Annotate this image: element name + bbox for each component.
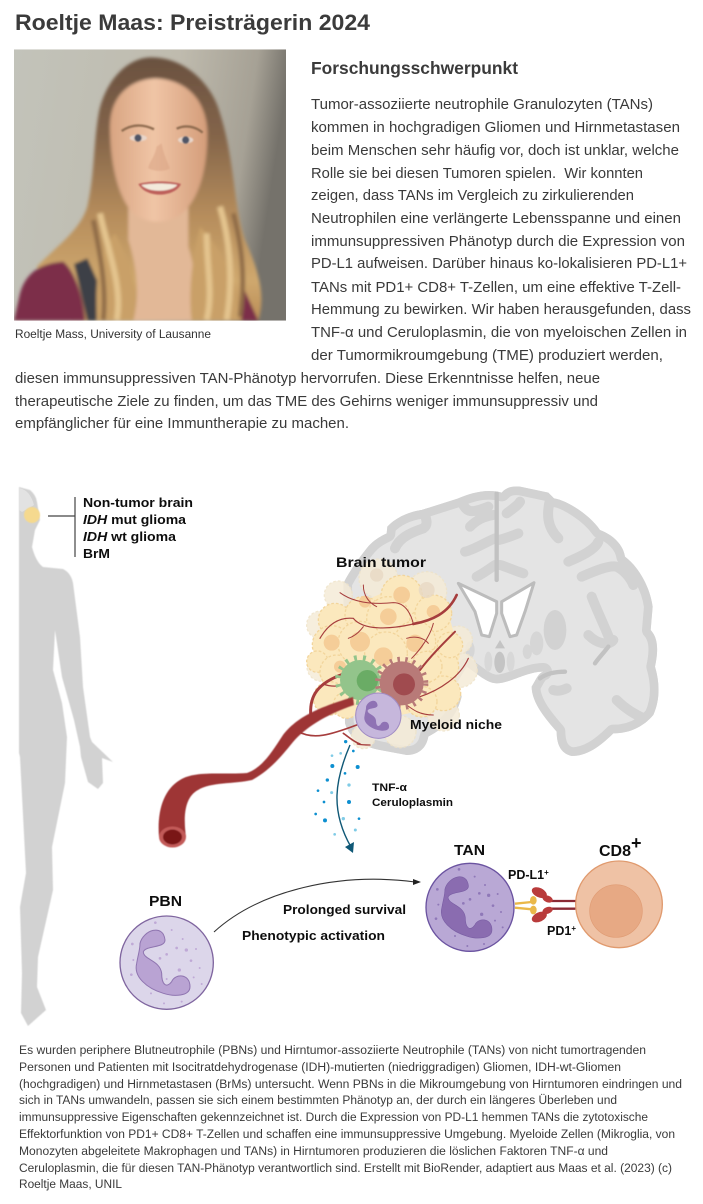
label: myeloid niche: Myeloid niche <box>410 717 502 732</box>
label: CD8+: + <box>631 833 642 853</box>
sample type list: IDH mut glioma <box>83 512 187 527</box>
icon: purple TAN in niche <box>356 693 401 738</box>
body text: Hemmung zu bewirken. Wir haben herausgefunden, dass <box>311 301 691 318</box>
brain tumor cell cluster <box>298 559 477 749</box>
PD-L1 and PD1 receptor interaction <box>515 885 575 925</box>
human silhouette <box>19 487 113 1026</box>
blood vessel tube <box>159 697 354 848</box>
body text: diesen immunsuppressiven TAN-Phänotyp hervorrufen. Diese Erkenntnisse helfen, neue <box>15 370 600 387</box>
body text: Tumor-assoziierte neutrophile Granulozyten (TANs) <box>311 96 653 113</box>
cell: CD8 T cell <box>576 861 662 948</box>
sample type list: IDH wt glioma <box>83 529 177 544</box>
figure caption: Effektorfunktion von PD1+ CD8+ T-Zellen und schaffen eine immunsuppressive Umgebung. Myeloide Zellen (Mikroglia, von <box>19 1127 675 1141</box>
figure caption: sich in TANs umwandeln, passen sie sich einem bestimmten Phänotyp an, der durch ein längeres Überleben und <box>19 1093 617 1107</box>
sample type list <box>83 495 193 561</box>
label: PD-L1+: + <box>544 868 549 877</box>
body text: TANs mit PD1+ CD8+ T-Zellen, um eine effektive T-Zell- <box>311 279 681 296</box>
label: TAN: TAN <box>454 843 485 859</box>
figure caption <box>19 1043 682 1191</box>
sample type list: Non-tumor brain <box>83 495 193 510</box>
sample type list: BrM <box>83 546 110 561</box>
label: PBN: PBN <box>149 893 182 910</box>
cell: PBN <box>120 916 213 1009</box>
label: PD1+: PD1 <box>547 924 571 938</box>
icon: red macrophage cell <box>379 661 424 706</box>
label: PD-L1+: PD-L1 <box>508 868 544 882</box>
label: arrow captions <box>242 902 406 943</box>
cytokine dots <box>314 740 360 836</box>
cell: TAN <box>426 863 514 951</box>
body text: TNF-α und Ceruloplasmin, die von myeloischen Zellen in <box>311 324 687 341</box>
figure caption: Es wurden periphere Blutneutrophile (PBNs) und Hirntumor-assoziierte Neutrophile (TANs) von nicht tumortragenden <box>19 1043 646 1057</box>
figure caption: Personen und Patienten mit Isocitratdehydrogenase (IDH)-mutierten (niedriggradigen) Gliomen, IDH-wt-Gliomen <box>19 1060 621 1074</box>
body text: therapeutische Ziele zu finden, um das TME des Gehirns weniger immunsuppressiv und <box>15 393 598 410</box>
label: arrow captions: Phenotypic activation <box>242 928 385 943</box>
label: cytokines: Ceruloplasmin <box>372 797 453 809</box>
photo caption: Roeltje Mass, University of Lausanne <box>15 327 211 341</box>
ventricles <box>458 583 534 637</box>
label: PD1+: + <box>571 924 576 933</box>
body text: Neutrophilen eine verlängerte Lebensspanne und einen <box>311 210 681 227</box>
body text: kommen in hochgradigen Gliomen und Hirnmetastasen <box>311 119 680 136</box>
brain cross-section <box>343 486 659 756</box>
figure caption: Roeltje Maas, UNIL <box>19 1177 122 1191</box>
figure caption: (hochgradigen) und Hirnmetastasen (BrMs) untersucht. Wenn PBNs in die Mikroumgebung von Hirntumoren eindringen und <box>19 1077 682 1091</box>
arrow: PBN to TAN <box>214 879 421 932</box>
label: CD8+: CD8 <box>599 843 631 860</box>
sample type bracket <box>48 497 75 557</box>
icon: tumor in head <box>24 507 40 523</box>
figure caption: Ceruloplasmin, die für diesen TAN-Phänotyp verantwortlich sind. Erstellt mit BioRender, adaptiert aus Maas et al. (2023) (c) <box>19 1161 672 1175</box>
body text: zeigen, dass TANs im Vergleich zu zirkulierenden <box>311 187 634 204</box>
portrait photo <box>14 49 286 321</box>
body text <box>15 96 691 432</box>
body text: PD-L1 aufweisen. Darüber hinaus ko-lokalisieren PD-L1+ <box>311 255 687 272</box>
figure caption: immunsuppressive Eigenschaften gekennzeichnet ist. Durch die Expression von PD-L1 hemmen TANs die zytotoxische <box>19 1110 648 1124</box>
body text: Rolle sie bei diesen Tumoren spielen. Wir konnten <box>311 165 643 182</box>
figure caption: Monozyten abgeleitete Makrophagen und TANs) in Hirntumoren produzieren die löslichen Faktoren TNF-α und <box>19 1144 608 1158</box>
title: Roeltje Maas: Preisträgerin 2024 <box>15 10 371 35</box>
body text: beim Menschen sehr häufig vor, doch ist unklar, welche <box>311 142 679 159</box>
arrow: cytokines to TAN <box>337 745 354 853</box>
section heading: Forschungsschwerpunkt <box>311 58 518 78</box>
body text: empfänglicher für eine Immuntherapie zu machen. <box>15 415 349 432</box>
body text: der Tumormikroumgebung (TME) produziert werden, <box>311 347 663 364</box>
label: arrow captions: Prolonged survival <box>283 902 406 917</box>
label: cytokines: TNF-α <box>372 782 407 794</box>
icon: green microglia cell <box>339 659 381 701</box>
label: brain tumor: Brain tumor <box>336 555 427 570</box>
body text: immunsuppressiven Phänotyp durch die Expression von <box>311 233 685 250</box>
label: cytokines <box>372 782 453 809</box>
tumor blood vessels <box>298 585 468 745</box>
